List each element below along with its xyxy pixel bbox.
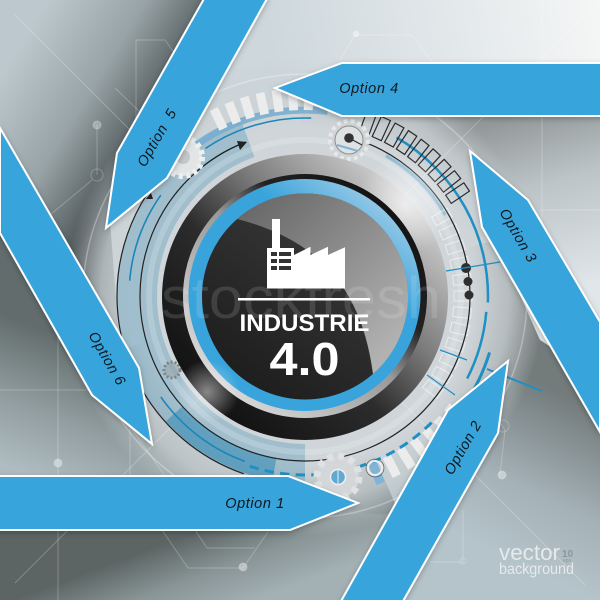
three connector dots <box>461 263 474 300</box>
blue cross line right <box>64 55 546 537</box>
watermark: stockfresh <box>161 266 441 331</box>
arrow: option 6 <box>0 128 152 444</box>
vector background badge: eps <box>563 558 572 564</box>
divider line <box>238 298 370 300</box>
arrow: option 1: Option 1 <box>225 496 285 512</box>
arrow: option 2 <box>340 361 508 600</box>
white tick bars top <box>210 88 313 131</box>
arrow: option 3 <box>470 151 600 432</box>
arrow: option 3: Option 3 <box>496 206 539 266</box>
arrow: option 2: Option 2 <box>442 418 485 478</box>
gear top <box>330 121 368 159</box>
ring highlights <box>355 155 455 255</box>
lower glow <box>175 360 239 424</box>
gear upper left <box>164 138 202 176</box>
faint grid ticks right side <box>423 208 472 398</box>
heading: 4.0: 4.0 <box>270 333 340 385</box>
vector background badge: 10 <box>562 549 574 560</box>
arrow: option 4: Option 4 <box>339 81 399 97</box>
glass face <box>202 194 408 400</box>
main round button <box>162 154 455 440</box>
arrow: option 5 <box>106 0 268 228</box>
tech dial bands <box>42 33 568 559</box>
small gear lower left <box>164 362 180 378</box>
curved black arcs with arrowheads <box>66 57 544 535</box>
white tick bars bottom right <box>52 43 558 549</box>
arrow: option 4 <box>275 63 600 116</box>
heading: INDUSTRIE: INDUSTRIE <box>240 310 370 337</box>
glass reflection <box>237 193 408 374</box>
icon: factory <box>267 219 345 288</box>
blue ring <box>188 179 420 411</box>
black outlined rectangles top right <box>359 111 469 203</box>
gear bottom <box>317 456 359 498</box>
small gear bottom right <box>366 459 384 477</box>
vector background badge <box>499 540 574 578</box>
vector background badge: vector <box>499 540 560 565</box>
arrow: option 6: Option 6 <box>85 329 128 389</box>
metal outer ring <box>162 154 448 440</box>
silver bezel <box>183 174 427 418</box>
vector background badge: background <box>499 561 574 578</box>
arrow: option 1 <box>0 476 358 530</box>
arrow: option 5: Option 5 <box>135 106 181 170</box>
